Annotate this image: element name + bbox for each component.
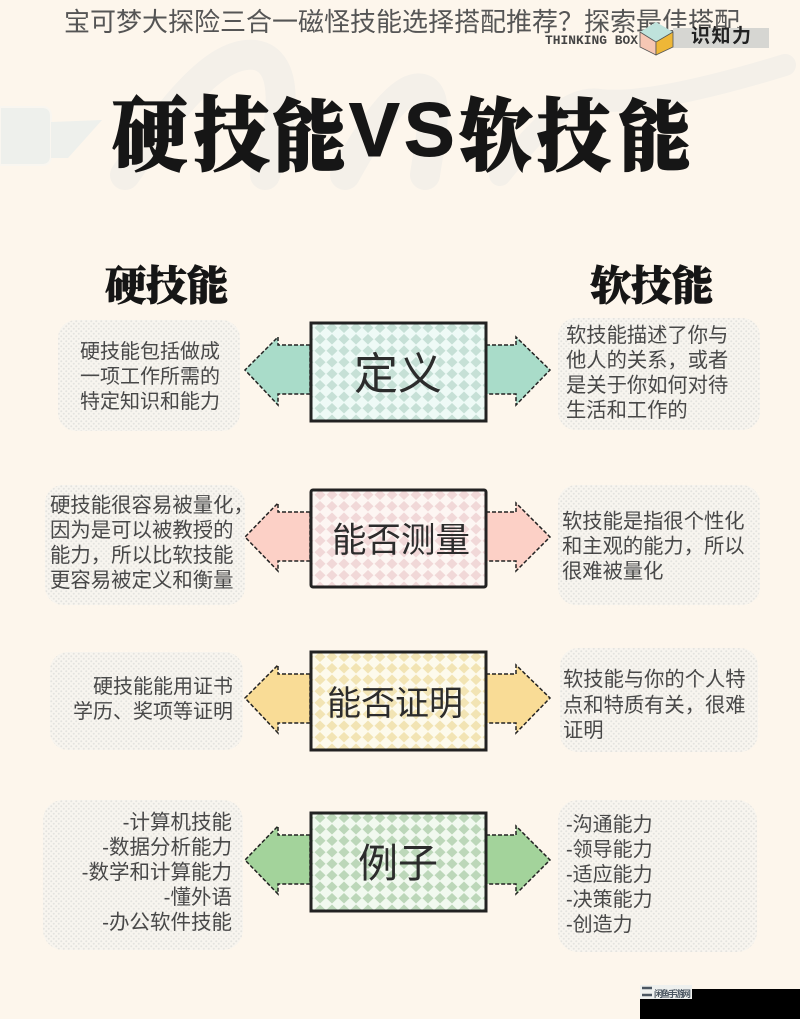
panel: soft skill provable	[560, 648, 758, 752]
arrow: left and right yellow	[245, 665, 550, 733]
arrow: left and right green	[245, 337, 550, 405]
panel: hard skill examples: -计算机技能	[123, 811, 232, 834]
box: provable: 能否证明	[327, 685, 463, 723]
panel: hard skill definition: 特定知识和能力	[80, 390, 220, 413]
box: examples: 例子	[358, 842, 438, 886]
panel: hard skill definition: 硬技能包括做成	[80, 340, 220, 363]
decorative brush swoosh behind title	[125, 55, 785, 175]
panel: soft skill measurable: 很难被量化	[562, 560, 663, 583]
panel: hard skill examples: -懂外语	[164, 886, 232, 909]
panel: soft skill provable: 软技能与你的个人特	[563, 668, 746, 691]
main title: 能	[619, 96, 690, 181]
logo: Thinking Box	[545, 22, 769, 55]
panel: soft skill definition: 生活和工作的	[566, 399, 688, 422]
panel: soft skill definition	[558, 318, 760, 430]
panel: hard skill examples: -数学和计算能力	[82, 861, 232, 884]
panel: hard skill provable: 学历、奖项等证明	[73, 700, 233, 723]
panel: hard skill examples: -办公软件技能	[102, 911, 232, 934]
panel: soft skill examples: -沟通能力	[566, 813, 653, 836]
heading: soft skills: 软技能	[590, 263, 713, 309]
main title: S	[404, 88, 455, 173]
panel: hard skill measurable: 因为是可以被教授的	[50, 519, 234, 542]
panel: hard skill measurable: 能力，所以比软技能	[50, 544, 234, 567]
box: definition: 定义	[354, 350, 442, 399]
panel: soft skill measurable	[558, 485, 760, 605]
arrow: left and right pink	[245, 503, 550, 571]
box: examples	[311, 813, 486, 911]
panel: soft skill definition: 是关于你如何对待	[566, 374, 728, 397]
heading: hard skills: 硬技能	[105, 263, 228, 309]
top caption: 宝可梦大探险三合一磁怪技能选择搭配推荐？探索最佳搭配	[64, 7, 740, 37]
main title	[112, 88, 690, 182]
row: provable	[50, 648, 758, 752]
panel: soft skill examples	[558, 800, 757, 952]
box: measurable	[311, 490, 486, 587]
row: measurable	[45, 485, 760, 605]
logo: Thinking Box: 识知力	[691, 25, 751, 47]
panel: hard skill provable	[50, 652, 243, 750]
box: definition	[311, 323, 486, 421]
row: definition	[58, 318, 760, 431]
panel: hard skill examples: -数据分析能力	[102, 836, 232, 859]
panel: hard skill measurable: 更容易被定义和衡量	[50, 569, 234, 592]
panel: soft skill examples: -适应能力	[566, 863, 653, 886]
panel: soft skill examples: -创造力	[566, 913, 633, 936]
main title: 技	[537, 94, 610, 182]
watermark corner	[640, 985, 800, 1019]
watermark corner: 闲鱼手游网	[654, 988, 691, 999]
main title: 软	[459, 94, 532, 182]
main title: 能	[273, 96, 345, 182]
panel: hard skill measurable	[45, 485, 254, 605]
panel: hard skill definition: 一项工作所需的	[80, 365, 220, 388]
panel: soft skill examples: -决策能力	[566, 888, 653, 911]
panel: soft skill examples: -领导能力	[566, 838, 653, 861]
main title: 技	[194, 91, 269, 182]
panel: hard skill examples	[43, 800, 243, 950]
row: examples	[43, 800, 757, 952]
panel: soft skill provable: 证明	[563, 719, 604, 742]
arrow: left and right green	[245, 826, 550, 894]
box: measurable: 能否测量	[332, 522, 470, 560]
icon: pen at left edge	[0, 107, 102, 165]
main title: 硬	[112, 91, 187, 182]
panel: hard skill measurable: 硬技能很容易被量化，	[50, 494, 254, 517]
panel: soft skill definition: 他人的关系，或者	[566, 349, 728, 372]
logo: Thinking Box: THINKING BOX	[545, 33, 638, 48]
main title: V	[349, 88, 400, 173]
panel: soft skill provable: 点和特质有关，很难	[563, 694, 746, 717]
panel: soft skill definition: 软技能描述了你与	[566, 324, 728, 347]
panel: soft skill measurable: 软技能是指很个性化	[562, 510, 745, 533]
panel: hard skill provable: 硬技能能用证书	[93, 675, 233, 698]
panel: hard skill definition	[58, 320, 240, 431]
box: provable	[311, 652, 486, 750]
panel: soft skill measurable: 和主观的能力，所以	[562, 535, 745, 558]
